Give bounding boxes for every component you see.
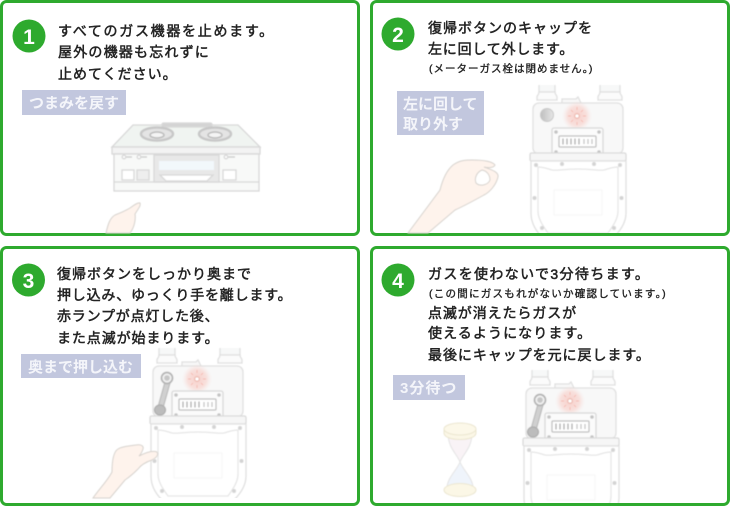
label: turn left and remove: 取り外す (403, 115, 463, 133)
panel 3: press reset button (2, 248, 358, 504)
label: turn the knob back (22, 90, 126, 115)
step number 4: 4 (392, 270, 404, 293)
instruction text 4: ガスを使わないで3分待ちます。 (428, 266, 650, 282)
panel 1: turn off all gas appliances (2, 2, 358, 234)
panel 4: wait three minutes (372, 248, 728, 506)
icon: pressing hand (93, 445, 158, 498)
instruction text 4: 使えるようになります。 (428, 325, 592, 341)
label: press all the way in: 奥まで押し込む (28, 358, 133, 376)
step number 1 (12, 20, 46, 52)
instruction text 4 (428, 266, 667, 363)
label: wait 3 minutes: 3分待つ (400, 380, 457, 397)
instruction text 1: 止めてください。 (58, 66, 178, 82)
instruction text 2: 左に回して外します。 (428, 41, 574, 57)
instruction text 1: すべてのガス機器を止めます。 (58, 23, 275, 39)
instruction text 3: 押し込み、ゆっくり手を離します。 (57, 287, 292, 303)
instruction text 4: (この間にガスもれがないか確認しています。) (429, 287, 667, 300)
label: turn the knob back: つまみを戻す (29, 95, 119, 112)
step number 3 (12, 264, 45, 296)
step number 3: 3 (23, 270, 34, 293)
label: turn left and remove (397, 91, 484, 135)
step number 2: 2 (392, 24, 404, 47)
instruction text 3: また点滅が始まります。 (57, 330, 220, 346)
icon: hourglass (444, 423, 476, 496)
icon: gas meter with cap removed (530, 85, 626, 237)
step number 2 (382, 18, 414, 50)
instruction text 2: (メーターガス栓は閉めません。) (429, 62, 593, 75)
icon: gas meter with lever (523, 370, 619, 506)
label: wait 3 minutes (393, 375, 465, 400)
instruction text 3: 復帰ボタンをしっかり奥まで (57, 266, 252, 282)
step number 1: 1 (23, 26, 35, 49)
panel 2: remove reset button cap (372, 2, 728, 237)
label: turn left and remove: 左に回して (403, 96, 478, 113)
icon: gas stove (112, 123, 260, 191)
icon: pointing hand (106, 203, 140, 233)
icon: pinching hand (408, 160, 498, 233)
instruction text 3: 赤ランプが点灯した後、 (57, 308, 219, 324)
instruction text 3 (57, 266, 292, 346)
icon: gas meter with lever (150, 348, 246, 500)
label: press all the way in (21, 354, 141, 378)
instruction text 2 (428, 20, 593, 75)
instruction text 4: 点滅が消えたらガスが (428, 305, 577, 321)
instruction text 1 (58, 23, 275, 82)
instruction text 4: 最後にキャップを元に戻します。 (428, 347, 651, 363)
instruction text 1: 屋外の機器も忘れずに (58, 44, 210, 60)
step number 4 (382, 264, 414, 296)
instruction text 2: 復帰ボタンのキャップを (428, 20, 593, 36)
